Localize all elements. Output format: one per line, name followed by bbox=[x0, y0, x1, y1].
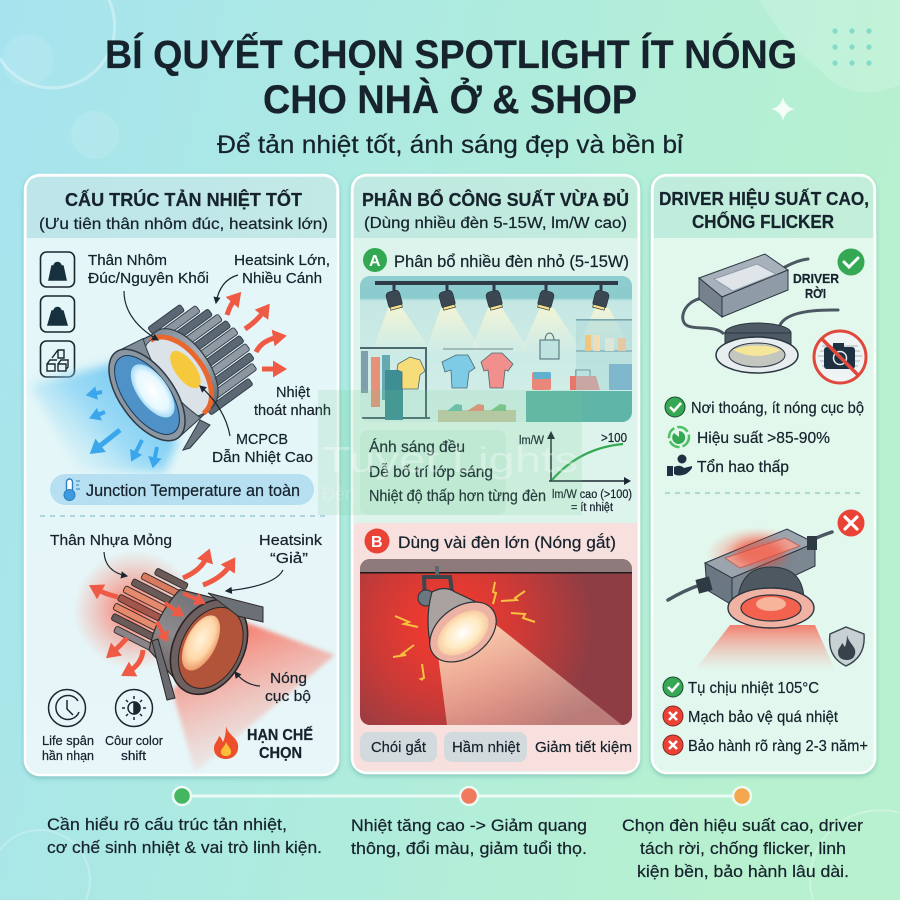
takeaway 3 bbox=[622, 816, 863, 881]
label: MCPCB bbox=[212, 431, 313, 466]
tag: heat trap bbox=[444, 732, 527, 762]
watermark: Đèn bbox=[322, 484, 355, 504]
panel: heat dissipation structure bbox=[25, 175, 338, 775]
label: fake heatsink bbox=[259, 532, 323, 567]
section B: big lamps bbox=[354, 523, 637, 771]
cool air arrows bbox=[92, 392, 157, 462]
label: colour shift bbox=[105, 733, 164, 763]
lm/W chart: >100 bbox=[601, 431, 627, 445]
warning: limit choosing bbox=[247, 725, 313, 762]
benefits list: Nhiệt độ thấp hơn từng đèn bbox=[369, 488, 546, 505]
watermark: Tuyet Lights bbox=[322, 439, 578, 480]
watermark bbox=[318, 390, 582, 515]
label: colour shift: shift bbox=[121, 748, 146, 763]
benefit: low loss: Tổn hao thấp bbox=[697, 459, 789, 476]
panel header: PHÂN BỔ CÔNG SUẤT VỪA ĐỦ bbox=[362, 189, 629, 210]
section A heading bbox=[363, 248, 629, 272]
section B heading: B bbox=[371, 534, 383, 551]
hot room scene bbox=[360, 559, 632, 725]
label: local hot bbox=[265, 670, 311, 705]
clothing rack bbox=[360, 348, 430, 420]
takeaway 3: Chọn đèn hiệu suất cao, driver bbox=[622, 816, 863, 835]
icon: life span clock bbox=[48, 690, 86, 726]
label: life span: hần nhạn bbox=[42, 748, 94, 763]
takeaway 1 bbox=[47, 815, 322, 857]
store counter and goods bbox=[526, 320, 632, 422]
bottom timeline bbox=[173, 787, 751, 805]
label: fake heatsink: “Giả” bbox=[270, 550, 308, 567]
point: warranty: Bảo hành rõ ràng 2-3 năm+ bbox=[688, 738, 868, 755]
warning: limit choosing: HẠN CHẾ bbox=[247, 725, 313, 744]
badge: cross bbox=[838, 510, 864, 536]
label: large heatsink bbox=[234, 252, 330, 287]
label: fake heatsink: Heatsink bbox=[259, 532, 323, 549]
junction temperature pill bbox=[50, 474, 314, 505]
takeaway 2 bbox=[351, 816, 587, 858]
lm/W chart: lm/W cao (>100) bbox=[552, 489, 632, 501]
integrated hot driver illustration bbox=[668, 527, 835, 670]
panel header: DRIVER HIỆU SUẤT CAO, bbox=[659, 188, 869, 209]
icons: weight and blocks bbox=[40, 252, 74, 377]
junction temperature pill: Junction Temperature an toàn bbox=[86, 482, 300, 500]
blue light beam bbox=[30, 362, 178, 472]
section B heading bbox=[364, 528, 616, 554]
tag: glare: Chói gắt bbox=[371, 739, 427, 756]
label: local hot: cục bộ bbox=[265, 688, 311, 705]
bad lamp illustration bbox=[95, 556, 263, 707]
section A heading: A bbox=[369, 253, 381, 270]
benefit: efficiency bbox=[669, 427, 830, 447]
point: capacitor rating bbox=[663, 677, 819, 697]
takeaway 1: cơ chế sinh nhiệt & vai trò linh kiện. bbox=[47, 838, 322, 857]
glare beam bbox=[438, 620, 622, 725]
heat sparks bbox=[393, 582, 535, 680]
warning: limit choosing: CHỌN bbox=[259, 745, 302, 762]
benefits list: Ánh sáng đều bbox=[369, 437, 465, 456]
tag: reduced saving: Giảm tiết kiệm bbox=[535, 739, 632, 756]
icon: colour shift bbox=[116, 690, 152, 726]
panel header: CHỐNG FLICKER bbox=[692, 211, 834, 232]
label: large heatsink: Nhiều Cánh bbox=[242, 270, 322, 287]
benefit: ventilated: Nơi thoáng, ít nóng cục bộ bbox=[691, 400, 864, 417]
label: separate driver: RỜI bbox=[805, 286, 826, 301]
lm/W chart: = ít nhiệt bbox=[571, 502, 614, 514]
panel header: (Dùng nhiều đèn 5-15W, lm/W cao) bbox=[364, 215, 627, 232]
heat arrows bbox=[96, 556, 231, 672]
panel header bbox=[354, 177, 637, 238]
takeaway 1: Cần hiểu rõ cấu trúc tản nhiệt, bbox=[47, 815, 287, 834]
label: colour shift: Côur color bbox=[105, 733, 164, 748]
label: aluminium body: Thân Nhôm bbox=[88, 252, 167, 269]
hanging shirts bbox=[442, 349, 513, 388]
point: overheat protection: Mạch bảo vệ quá nhiệt bbox=[688, 709, 839, 726]
light cones bbox=[375, 308, 622, 350]
benefits list: Dễ bố trí lớp sáng bbox=[369, 462, 493, 481]
side tabs bbox=[152, 593, 263, 700]
lm/W chart bbox=[519, 431, 632, 514]
label: life span bbox=[42, 733, 94, 763]
benefit: efficiency: Hiệu suất >85-90% bbox=[697, 430, 830, 447]
takeaway 2: Nhiệt tăng cao -> Giảm quang bbox=[351, 816, 587, 835]
label: large heatsink: Heatsink Lớn, bbox=[234, 252, 330, 269]
panel header bbox=[654, 177, 873, 238]
takeaway 3: tách rời, chống flicker, linh bbox=[640, 839, 846, 858]
label: thin plastic body: Thân Nhựa Mỏng bbox=[50, 532, 172, 549]
spotlights bbox=[385, 285, 610, 310]
label: heat escapes fast: thoát nhanh bbox=[254, 402, 331, 419]
leader lines bbox=[124, 275, 238, 436]
red beam and glow bbox=[73, 550, 335, 772]
leader lines bbox=[104, 552, 283, 686]
shop scene with track lights bbox=[360, 276, 632, 422]
label: life span: Life spân bbox=[42, 733, 94, 748]
point: capacitor rating: Tụ chịu nhiệt 105°C bbox=[688, 680, 819, 697]
panel header: CẤU TRÚC TẢN NHIỆT TỐT bbox=[65, 189, 303, 210]
panel: power distribution bbox=[352, 175, 639, 773]
spot lamp bbox=[418, 566, 497, 662]
icon: no flicker camera bbox=[814, 331, 866, 383]
lm/W chart: lm/W bbox=[519, 435, 544, 447]
title: BÍ QUYẾT CHỌN SPOTLIGHT ÍT NÓNG bbox=[105, 31, 797, 77]
label: aluminium body bbox=[88, 252, 209, 287]
tag: glare bbox=[360, 732, 437, 762]
icon: fire shield bbox=[830, 627, 864, 666]
section B heading: Dùng vài đèn lớn (Nóng gắt) bbox=[398, 533, 616, 552]
badge: check bbox=[838, 248, 864, 276]
separate driver and lamp illustration bbox=[683, 254, 838, 373]
label: heat escapes fast: Nhiệt bbox=[276, 384, 311, 401]
tag: heat trap: Hầm nhiệt bbox=[452, 739, 521, 756]
section A heading: Phân bổ nhiều đèn nhỏ (5-15W) bbox=[394, 252, 629, 271]
panel header bbox=[27, 177, 336, 238]
heat arrows bbox=[227, 298, 279, 369]
subtitle: Để tản nhiệt tốt, ánh sáng đẹp và bền bỉ bbox=[217, 131, 683, 159]
good lamp illustration bbox=[93, 287, 268, 455]
label: separate driver bbox=[793, 271, 840, 301]
label: aluminium body: Đúc/Nguyên Khối bbox=[88, 270, 209, 287]
takeaway 3: kiện bền, bảo hành lâu dài. bbox=[637, 862, 849, 881]
benefits list bbox=[360, 430, 546, 515]
panel: driver bbox=[652, 175, 875, 773]
label: MCPCB: MCPCB bbox=[236, 431, 288, 448]
title: CHO NHÀ Ở & SHOP bbox=[263, 76, 637, 122]
title bbox=[105, 31, 797, 122]
benefit: low loss bbox=[667, 454, 789, 476]
clip tab bbox=[183, 420, 210, 450]
label: separate driver: DRIVER bbox=[793, 271, 840, 286]
label: heat escapes fast bbox=[254, 384, 331, 419]
takeaway 2: thông, đổi màu, giảm tuổi thọ. bbox=[351, 839, 587, 858]
label: MCPCB: Dẫn Nhiệt Cao bbox=[212, 449, 313, 466]
icon: flame bbox=[214, 726, 238, 759]
panel header: (Ưu tiên thân nhôm đúc, heatsink lớn) bbox=[39, 216, 328, 233]
label: local hot: Nóng bbox=[270, 670, 307, 687]
shoes table bbox=[438, 404, 516, 422]
